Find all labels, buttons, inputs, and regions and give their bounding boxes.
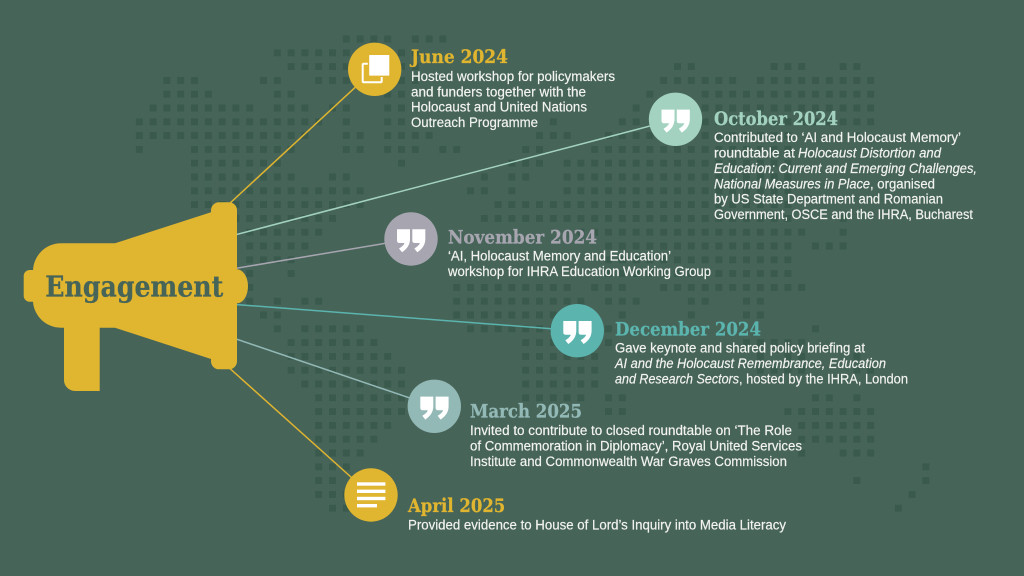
description: roundtable at: [714, 146, 795, 161]
description: Government, OSCE and the IHRA, Bucharest: [714, 207, 973, 222]
description: National Measures in Place: [714, 176, 870, 191]
description: by US State Department and Romanian: [714, 192, 943, 207]
date heading: March 2025: [470, 401, 582, 423]
description: , hosted by the IHRA, London: [739, 371, 908, 386]
description: and Research Sectors: [615, 371, 739, 386]
description: Provided evidence to House of Lord’s Inquiry into Media Literacy: [408, 517, 786, 532]
description: workshop for IHRA Education Working Group: [447, 264, 711, 279]
icon: quotation marks: [384, 212, 438, 266]
date heading: April 2025: [407, 495, 505, 517]
description: [614, 341, 908, 386]
description: [714, 130, 977, 222]
event: April 2025: [344, 468, 786, 532]
icon: overlapping squares: [348, 43, 401, 96]
event: December 2024: [551, 304, 908, 386]
connector lines: [226, 69, 676, 495]
event: November 2024: [384, 212, 711, 279]
description: Holocaust Distortion and: [798, 146, 942, 161]
description: Hosted workshop for policymakers: [411, 69, 615, 84]
description: Outreach Programme: [411, 115, 538, 130]
megaphone label: Engagement: [45, 270, 224, 304]
date heading: October 2024: [714, 108, 838, 130]
event: March 2025: [408, 380, 802, 469]
description: ‘AI, Holocaust Memory and Education’: [448, 249, 671, 264]
icon: document lines: [344, 468, 398, 522]
icon: quotation marks: [649, 93, 702, 146]
icon: quotation marks: [551, 304, 604, 357]
description: , organised: [870, 176, 935, 191]
date heading: June 2024: [409, 46, 508, 68]
date heading: December 2024: [615, 318, 761, 340]
event: June 2024: [348, 43, 615, 130]
icon: quotation marks: [408, 380, 461, 433]
date heading: November 2024: [448, 226, 597, 248]
description: Gave keynote and shared policy briefing at: [615, 341, 865, 356]
dotted world map: [136, 39, 936, 508]
description: Invited to contribute to closed roundtable on ‘The Role: [470, 423, 792, 438]
description: [411, 69, 615, 130]
description: AI and the Holocaust Remembrance, Education: [614, 356, 886, 371]
description: [470, 423, 802, 469]
megaphone: [24, 202, 248, 391]
event: October 2024: [649, 93, 977, 222]
description: of Commemoration in Diplomacy’, Royal United Services: [470, 439, 802, 454]
description: and funders together with the: [411, 84, 586, 99]
description: Contributed to ‘AI and Holocaust Memory’: [714, 130, 961, 145]
description: Education: Current and Emerging Challenges,: [714, 161, 977, 176]
description: Institute and Commonwealth War Graves Commission: [470, 454, 787, 469]
description: [447, 249, 711, 279]
description: Holocaust and United Nations: [411, 100, 587, 115]
